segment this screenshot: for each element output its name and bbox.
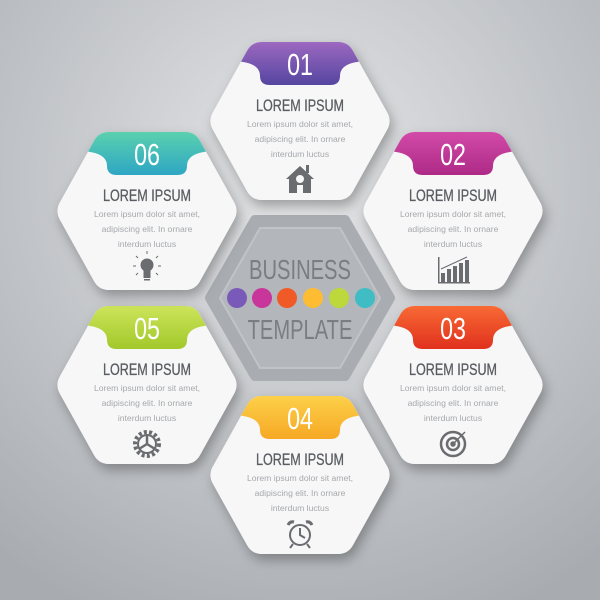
panel: 02: LOREM IPSUM — [409, 186, 497, 206]
panel: 01 — [210, 42, 390, 200]
icon: gear — [135, 432, 159, 456]
panel: 01: 01 — [287, 47, 313, 82]
panel: 06: adipiscing elit. In ornare — [102, 224, 193, 234]
heading: template: TEMPLATE — [248, 315, 352, 346]
color dots — [227, 288, 375, 308]
panel: 02 — [363, 132, 543, 290]
panel: 05: Lorem ipsum dolor sit amet, — [94, 383, 200, 393]
panel: 01: adipiscing elit. In ornare — [255, 134, 346, 144]
panel: 05: LOREM IPSUM — [103, 360, 191, 380]
panel: 02: 02 — [440, 137, 466, 172]
panel: 01: Lorem ipsum dolor sit amet, — [247, 119, 353, 129]
panel: 04: interdum luctus — [271, 503, 329, 513]
panel: 06: Lorem ipsum dolor sit amet, — [94, 209, 200, 219]
center hexagon — [210, 220, 390, 376]
panel: 04: LOREM IPSUM — [256, 450, 344, 470]
panel: 04: 04 — [287, 401, 313, 436]
panel: 04: Lorem ipsum dolor sit amet, — [247, 473, 353, 483]
panel: 04: adipiscing elit. In ornare — [255, 488, 346, 498]
panel: 03: adipiscing elit. In ornare — [408, 398, 499, 408]
heading: business: BUSINESS — [249, 255, 351, 286]
panel: 05: interdum luctus — [118, 413, 176, 423]
panel: 06 — [57, 132, 237, 290]
icon: target — [441, 432, 465, 456]
panel: 04 — [210, 396, 390, 554]
panel: 02: interdum luctus — [424, 239, 482, 249]
panel: 06: 06 — [134, 137, 160, 172]
icon: bar chart — [438, 257, 470, 284]
panel: 06: interdum luctus — [118, 239, 176, 249]
panel: 03: 03 — [440, 311, 466, 346]
icon: light bulb — [133, 251, 161, 280]
panel: 02: Lorem ipsum dolor sit amet, — [400, 209, 506, 219]
panel: 03: interdum luctus — [424, 413, 482, 423]
panel: 05: adipiscing elit. In ornare — [102, 398, 193, 408]
panel: 01: LOREM IPSUM — [256, 96, 344, 116]
panel: 05: 05 — [134, 311, 160, 346]
icon: alarm clock — [288, 522, 312, 548]
panel: 02: adipiscing elit. In ornare — [408, 224, 499, 234]
panel: 03: Lorem ipsum dolor sit amet, — [400, 383, 506, 393]
panel: 03: LOREM IPSUM — [409, 360, 497, 380]
panel: 03 — [363, 306, 543, 464]
panel: 01: interdum luctus — [271, 149, 329, 159]
panel: 06: LOREM IPSUM — [103, 186, 191, 206]
icon: house — [286, 165, 314, 193]
panel: 05 — [57, 306, 237, 464]
